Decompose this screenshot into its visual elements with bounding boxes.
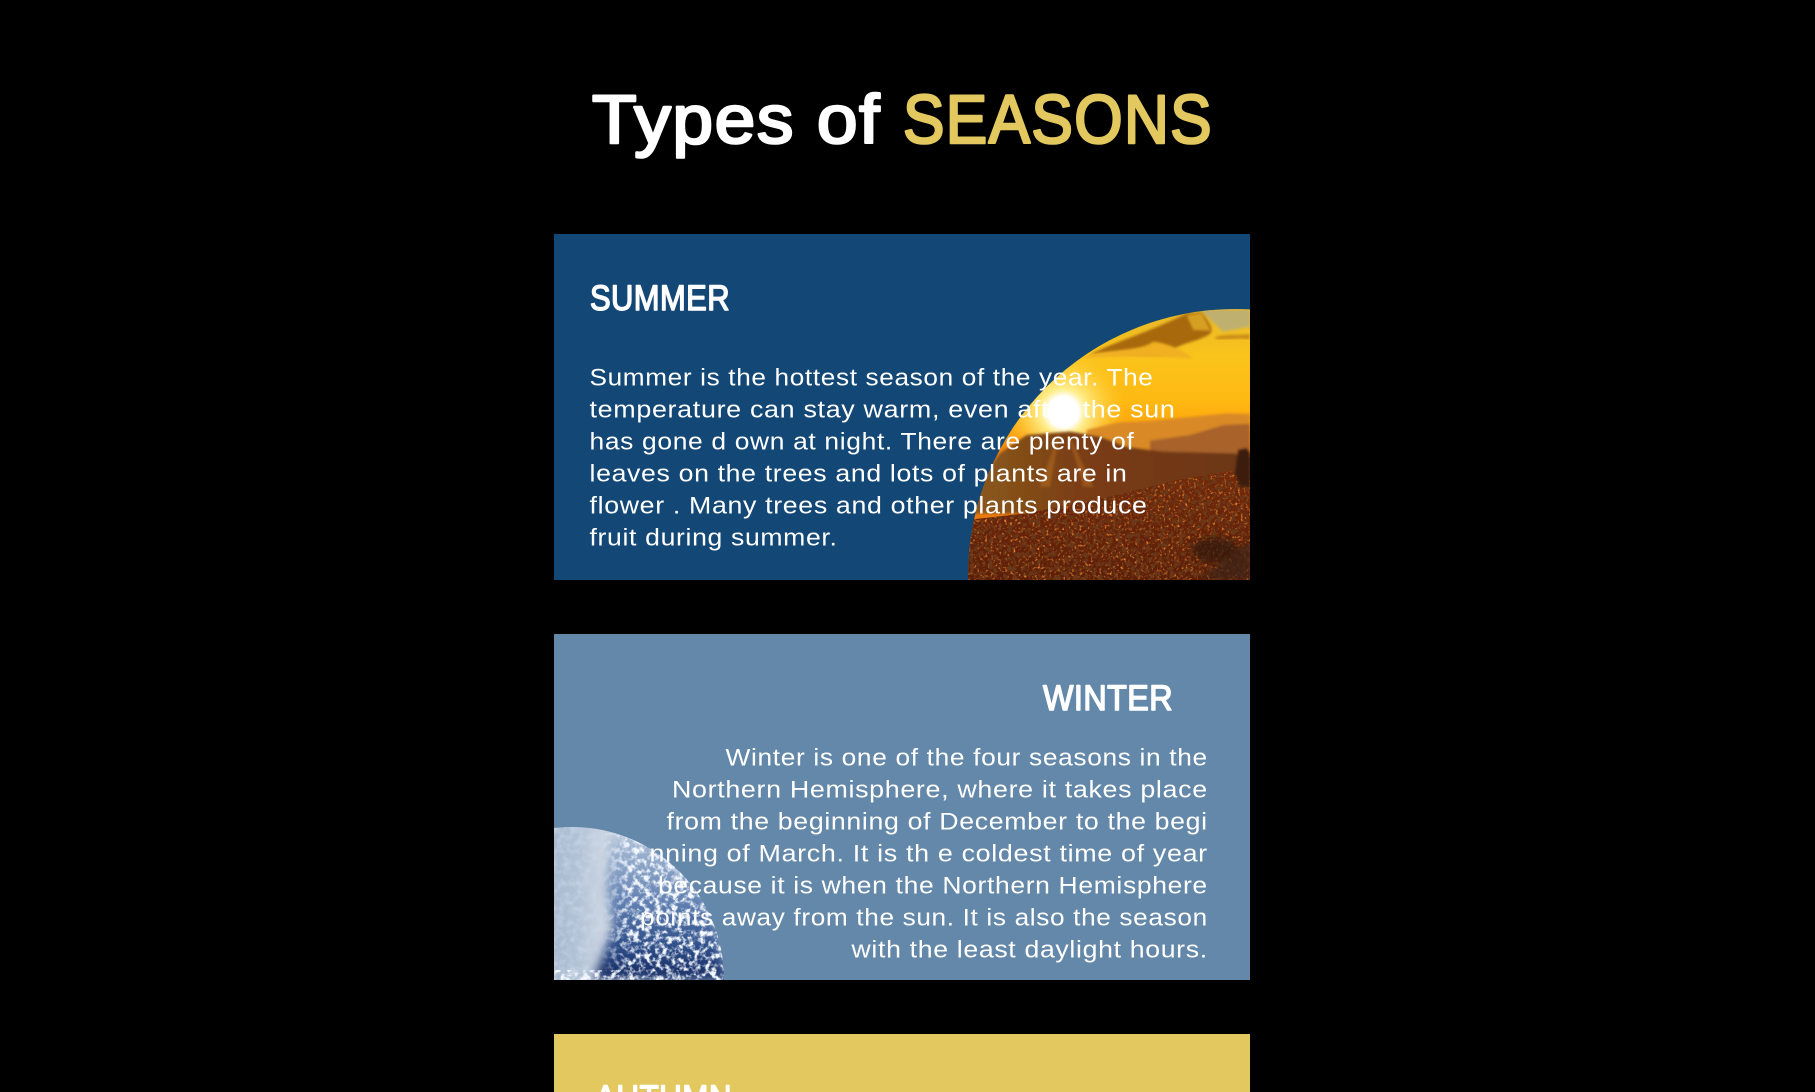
text: summer description: fruit during summer.	[590, 525, 838, 552]
text: winter description: Northern Hemisphere, where it takes place	[672, 776, 1208, 803]
text: winter description: Winter is one of the four seasons in the	[726, 744, 1208, 771]
text: winter description: from the beginning of December to the begi	[666, 808, 1208, 835]
title: Types of	[592, 81, 881, 158]
panel: summer	[554, 234, 1250, 580]
text: winter description	[640, 744, 1208, 963]
text: winter description: points away from the sun. It is also the season	[640, 904, 1208, 931]
title: SEASONS	[903, 81, 1213, 158]
text: summer description: has gone d own at night. There are plenty of	[590, 429, 1134, 456]
text: summer description	[590, 365, 1176, 552]
text: summer description: leaves on the trees and lots of plants are in	[590, 461, 1128, 488]
panel: winter	[554, 634, 1250, 980]
image: snowy fir tree	[554, 827, 724, 980]
panel: autumn	[554, 1034, 1250, 1092]
heading: winter: WINTER	[1043, 679, 1173, 718]
text: winter description: with the least daylight hours.	[850, 936, 1208, 963]
text: summer description: flower . Many trees and other plants produce	[590, 493, 1148, 520]
heading: summer: SUMMER	[590, 279, 730, 318]
title	[592, 81, 1213, 158]
text: summer description: temperature can stay warm, even after the sun	[590, 397, 1176, 424]
text: winter description: nning of March. It is th e coldest time of year	[650, 840, 1208, 867]
text: winter description: because it is when the Northern Hemisphere	[658, 872, 1208, 899]
text: summer description: Summer is the hottest season of the year. The	[590, 365, 1154, 392]
image: sunset over hills	[968, 309, 1250, 580]
